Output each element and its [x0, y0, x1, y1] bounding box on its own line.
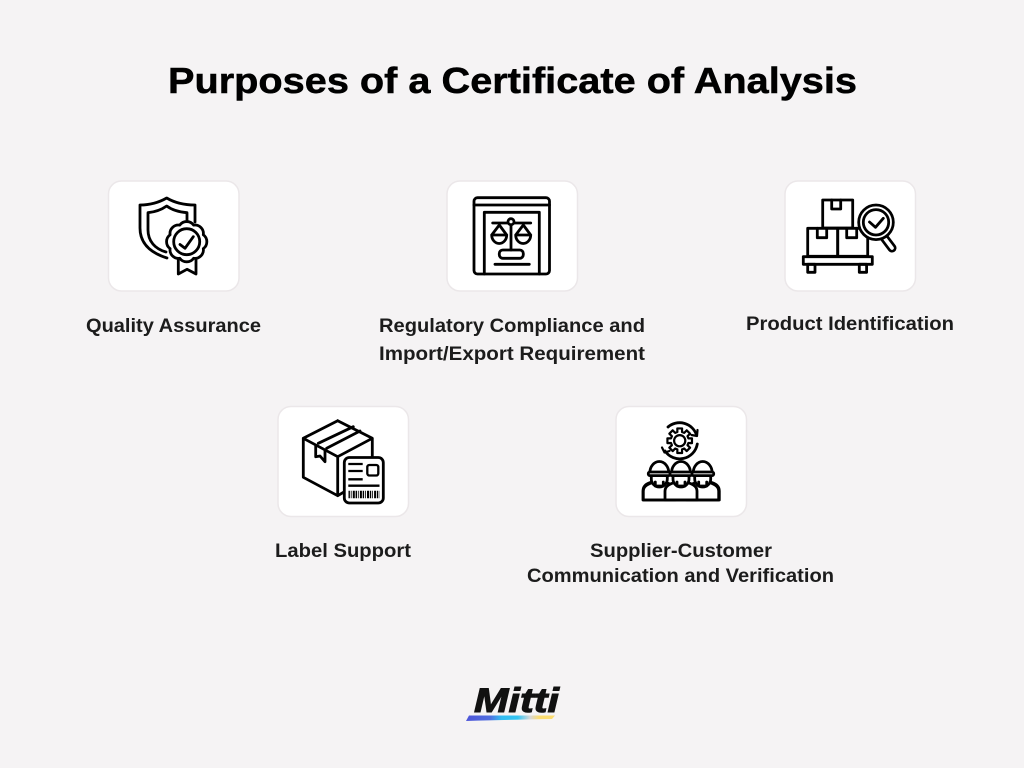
label: product identification: Product Identification: [746, 314, 954, 335]
panel: regulatory compliance: [379, 181, 646, 365]
worker left: [643, 462, 675, 500]
worker right: [687, 462, 719, 500]
worker centre: [665, 462, 697, 500]
panel: quality assurance: [86, 181, 261, 337]
label: regulatory compliance: Regulatory Compliance and: [379, 316, 645, 337]
panel: supplier-customer communication: [527, 406, 834, 587]
label: regulatory compliance: [379, 316, 646, 365]
card: quality assurance: [108, 181, 239, 291]
title: Purposes of a Certificate of Analysis: [168, 60, 857, 101]
logo swoosh: [466, 716, 555, 721]
icon: scales of justice document: [474, 198, 550, 274]
label: regulatory compliance: Import/Export Requirement: [379, 344, 646, 365]
icon: boxes on pallet with magnifier: [803, 200, 893, 272]
card: product identification: [785, 181, 916, 291]
panel: product identification: [746, 181, 954, 335]
logo: Mitti: Mitti: [474, 682, 561, 720]
card: regulatory compliance: [447, 181, 578, 291]
panel: label support: [275, 406, 412, 562]
label: supplier-customer communication: [527, 541, 834, 587]
label: supplier-customer communication: Supplier-Customer: [590, 541, 773, 562]
icon: parcel with shipping label: [303, 421, 383, 503]
card: supplier-customer communication: [616, 406, 746, 516]
gear with circular arrows: [662, 423, 698, 459]
label: quality assurance: Quality Assurance: [86, 316, 261, 337]
icon: gear and workers: [643, 423, 719, 500]
icon: shield with badge: [140, 198, 207, 274]
label: label support: Label Support: [275, 541, 412, 562]
label: supplier-customer communication: Communication and Verification: [527, 566, 834, 587]
card: label support: [278, 406, 408, 516]
